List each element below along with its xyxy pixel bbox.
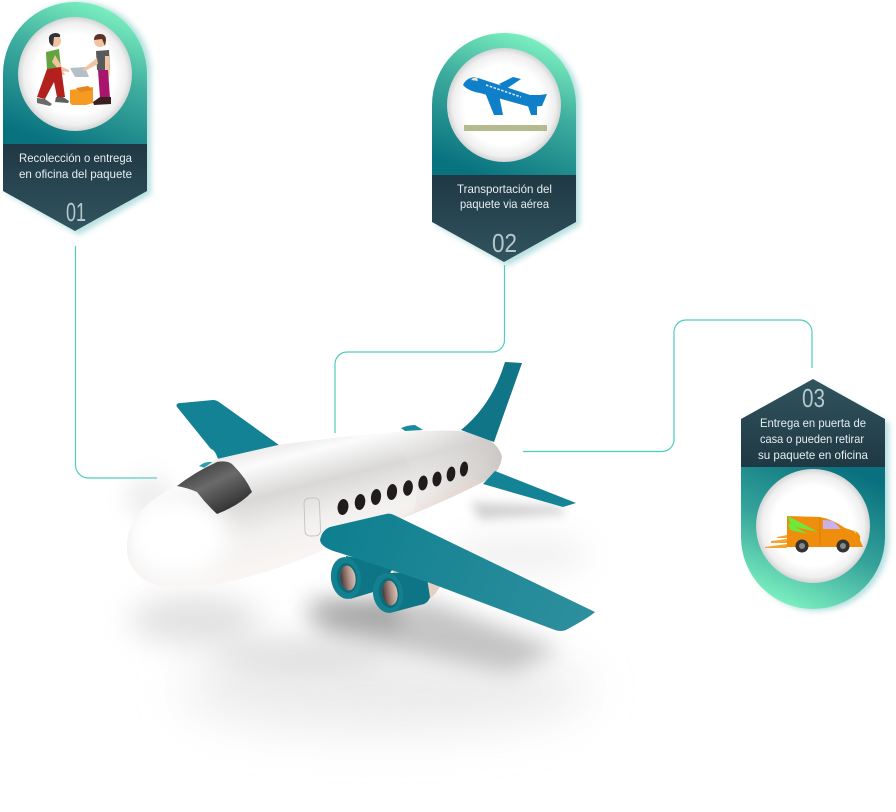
windshield xyxy=(177,461,252,514)
plane ground shadow xyxy=(126,476,590,732)
connector line 3 xyxy=(523,320,812,452)
badge 01: pickup or office delivery xyxy=(3,2,151,235)
connector line 2 xyxy=(335,265,504,433)
near wing xyxy=(320,514,595,631)
row of cabin windows xyxy=(337,461,469,516)
badge 02 number: 02 xyxy=(492,228,517,258)
badge 01 number: 01 xyxy=(66,197,86,227)
engine 1 xyxy=(328,555,395,601)
connector line 1 xyxy=(76,246,157,478)
icon: blue plane taking off xyxy=(463,77,547,115)
vertical tail fin xyxy=(461,362,522,442)
icon: two people exchanging a package xyxy=(37,33,111,106)
engine 2 xyxy=(370,571,430,615)
badge 03 description xyxy=(758,416,868,462)
cabin door xyxy=(304,498,321,536)
badge 02 gradient top xyxy=(432,33,576,177)
fuselage shading and nose highlight xyxy=(120,431,502,577)
badge 01 dark panel xyxy=(3,144,147,231)
small top fin xyxy=(401,425,423,431)
badge 02 description: paquete via aérea xyxy=(460,197,549,211)
badge 03 dark panel xyxy=(741,379,885,467)
badge 03 gradient bottom xyxy=(741,465,885,609)
far engine pylon stub xyxy=(199,462,213,468)
rear stabilizer xyxy=(483,471,576,507)
badge 03 number: 03 xyxy=(802,383,825,413)
badge 02 description xyxy=(457,182,552,211)
badge 02 dark panel xyxy=(432,175,576,262)
badge 03 description: su paquete en oficina xyxy=(758,448,868,462)
badge 03 description: Entrega en puerta de xyxy=(760,416,866,430)
badge 02: air transport xyxy=(432,33,580,266)
badge 03: door delivery xyxy=(741,379,889,611)
badge 01 description xyxy=(19,151,132,181)
icon: runway xyxy=(464,125,547,131)
far wing xyxy=(176,400,279,459)
fuselage xyxy=(127,431,502,588)
icon: orange delivery van xyxy=(765,516,863,552)
badge 01 icon circle xyxy=(18,17,132,131)
badge 01 description: en oficina del paquete xyxy=(19,167,132,181)
badge 02 description: Transportación del xyxy=(457,182,552,196)
badge 01 description: Recolección o entrega xyxy=(19,151,132,165)
badge 02 icon circle xyxy=(447,48,561,162)
badge 03 description: casa o pueden retirar xyxy=(760,432,864,446)
badge 01 gradient top xyxy=(3,2,147,146)
badge 03 icon circle xyxy=(756,469,870,583)
airplane xyxy=(120,362,595,631)
belly under wing xyxy=(390,560,442,606)
